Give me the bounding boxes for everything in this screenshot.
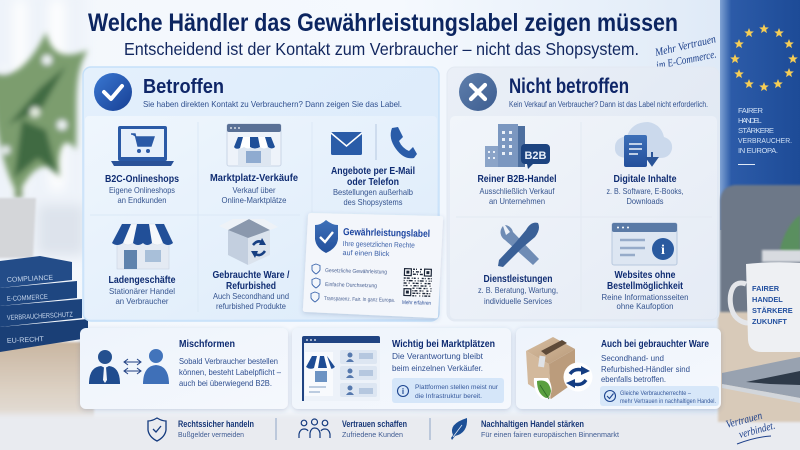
mug: STÄRKERE [752,306,793,315]
callout: Plattformen: Plattformen stellen meist nur [415,384,499,391]
card: Auch bei gebrauchter Ware: ebenfalls betroffen. [601,374,666,384]
handwritten note: Vertrauen verbindet [725,410,777,444]
label card: Gewährleistungslabel: Gewährleistungslabel [343,227,430,240]
item: Websites ohne Bestellmöglichkeit: Reine Informationsseiten [602,292,689,302]
label checklist: Transparenz. Fair. In ganz Europa. [324,296,395,304]
item: Angebote per E-Mail oder Telefon: Angebote per E-Mail [331,166,415,177]
background: table [0,342,94,442]
background: EU flag [720,0,800,230]
handwritten note: Vertrauen verbindet: Vertrauen [725,410,764,431]
handwritten note: Vertrauen verbindet: verbindet. [738,420,777,441]
card: Auch bei gebrauchter Ware: Auch bei gebrauchter Ware [601,339,709,350]
background: window blinds [0,0,85,260]
benefit: Nachhaltigen Handel stärken: Für einen fairen europäischen Binnenmarkt [481,430,620,439]
card: Mischformen: können, besteht Labelpflicht – [179,367,281,377]
item: Ladengeschäfte [108,224,176,306]
books stack [0,256,88,352]
item: B2C-Onlineshops: an Endkunden [118,195,167,205]
card: Wichtig bei Marktplätzen: beim einzelnen Verkäufer. [392,363,483,373]
icon: laptop with cart [111,126,174,166]
icon: wrench and screwdriver [498,223,539,267]
item: B2C-Onlineshops: Eigene Onlineshops [109,185,175,195]
books stack: COMPLIANCE [7,275,54,284]
item: Digitale Inhalte: z. B. Software, E-Books, [606,186,684,196]
icon: EU stars [730,24,798,91]
item: Marktplatz-Verkäufe [210,124,298,205]
item: Gebrauchte Ware / Refurbished: Refurbished [226,281,276,292]
callout: Gleiche Verbraucherrechte [600,386,719,406]
panel intro: Kein Verkauf an Verbraucher? Dann ist das Label nicht erforderlich. [509,100,708,109]
benefit: Nachhaltigen Handel stärken: Nachhaltigen Handel stärken [481,419,584,429]
item: Websites ohne Bestellmöglichkeit: Websites ohne [614,270,676,281]
benefit: Vertrauen schaffen [299,419,407,439]
icon: storefront [112,224,173,269]
mug [730,262,800,352]
callout: Plattformen [392,378,504,403]
item: Websites ohne Bestellmöglichkeit: ohne Kaufoption [616,301,674,311]
panel: Betroffen [83,67,443,321]
callout: Plattformen: i [402,387,404,396]
card: Mischformen: Sobald Verbraucher bestellen [179,356,278,366]
flag slogan [738,106,792,165]
item: Gebrauchte Ware / Refurbished: refurbished Produkte [216,301,286,311]
item: Ladengeschäfte: an Verbraucher [116,296,169,306]
subtitle: Entscheidend ist der Kontakt zum Verbraucher – nicht das Shopsystem. [124,39,639,59]
icon: business person and consumer [89,349,169,384]
item: Angebote per E-Mail oder Telefon: des Shopsystems [344,197,402,207]
flag slogan: IN EUROPA. [738,146,778,155]
item: Reiner B2B-Handel: Ausschließlich Verkauf [480,186,555,196]
icon: cross badge [459,73,497,111]
label checklist: Einfache Durchsetzung [325,282,377,289]
item: Angebote per E-Mail oder Telefon: Bestellungen außerhalb [333,187,413,197]
card: Wichtig bei Marktplätzen: Die Verantwortung bleibt [392,351,484,361]
item: Ladengeschäfte: Ladengeschäfte [108,275,176,286]
icon: open box with refresh arrows [219,219,278,265]
item: Digitale Inhalte: Downloads [626,196,664,206]
mug: ZUKUNFT [752,317,787,326]
background: laptop lid [720,185,800,325]
card: Mischformen: auch bei überwiegend B2B. [179,378,272,388]
item: Ladengeschäfte: Stationärer Handel [109,286,175,296]
background: lower tabletop [0,414,800,450]
handwritten note: Mehr Vertrauen im E-Commerce: im E-Commerce. [655,49,717,72]
QR code [403,268,432,297]
card: Auch bei gebrauchter Ware: Secondhand- und [601,353,664,363]
icon: cloud with document [615,122,672,167]
item: Dienstleistungen: z. B. Beratung, Wartung, [478,285,558,295]
item: Websites ohne Bestellmöglichkeit: Bestellmöglichkeit [607,281,684,292]
benefit: Vertrauen schaffen: Zufriedene Kunden [342,430,403,439]
flag slogan: FAIRER [738,106,764,115]
item: Gebrauchte Ware / Refurbished: Gebrauchte Ware / [212,270,290,281]
card: Mischformen [80,328,288,409]
label card: Gewährleistungslabel: Ihre gesetzlichen Rechte [343,239,415,250]
icon: phone [391,127,417,158]
callout: Gleiche Verbraucherrechte: mehr Vertrauen in nachhaltigen Handel. [620,399,716,405]
flag slogan: STÄRKERE [738,126,774,135]
label checklist [311,264,395,304]
icon: marketplace page with seller rows [302,336,380,401]
item: Gebrauchte Ware / Refurbished [212,219,290,311]
flag slogan: VERBRAUCHER. [738,136,792,145]
background: plant pot [0,198,36,258]
item: Dienstleistungen [478,223,558,306]
item: Angebote per E-Mail oder Telefon: oder Telefon [347,177,399,188]
flag slogan: HANDEL. [738,116,762,125]
handwritten note: Mehr Vertrauen im E-Commerce [653,33,718,78]
laptop base [722,357,800,403]
books stack: EU-RECHT [7,336,45,345]
item: Digitale Inhalte [606,122,684,206]
card: Wichtig bei Marktplätzen [292,328,511,409]
mug: FAIRER [752,284,780,293]
item: B2C-Onlineshops: B2C-Onlineshops [105,174,179,185]
mug: HANDEL [752,295,783,304]
item: Marktplatz-Verkäufe: Verkauf über [232,185,276,195]
item: Reiner B2B-Handel: Reiner B2B-Handel [478,174,557,185]
heading: Betroffen: Betroffen [143,76,224,98]
item: Digitale Inhalte: Digitale Inhalte [614,174,677,185]
benefits row [148,418,620,441]
heading: Nicht betroffen: Nicht betroffen [509,75,629,98]
item: Websites ohne Bestellmöglichkeit [602,223,689,311]
benefit: Vertrauen schaffen: Vertrauen schaffen [342,419,407,429]
label card: Gewährleistungslabel: auf einen Blick [343,248,390,258]
icon: office building with B2B badge: B2B [524,150,547,162]
icon: cardboard box with leaf and refresh badge [526,337,592,399]
label checklist: Gesetzliche Gewährleistung [325,268,387,276]
benefit: Rechtssicher handeln: Rechtssicher handeln [178,419,254,429]
handwritten note: Mehr Vertrauen im E-Commerce: Mehr Vertrauen [653,33,718,59]
icon: envelope [331,132,362,155]
callout: Gleiche Verbraucherrechte: Gleiche Verbraucherrechte – [620,391,692,397]
card: Auch bei gebrauchter Ware: Refurbished-Händler sind [601,364,690,374]
item: Reiner B2B-Handel: an Unternehmen [489,196,545,206]
background: plant [0,32,88,198]
item: Gebrauchte Ware / Refurbished: Auch Secondhand und [213,291,289,301]
label card: Gewährleistungslabel [303,213,443,318]
card: Wichtig bei Marktplätzen: Wichtig bei Marktplätzen [392,339,495,350]
panel intro: Sie haben direkten Kontakt zu Verbrauchern? Dann zeigen Sie das Label. [143,99,402,109]
panel: Nicht betroffen [447,67,719,321]
card: Auch bei gebrauchter Ware [516,328,721,409]
callout: Plattformen: die Infrastruktur bereit. [415,393,482,400]
benefit: Nachhaltigen Handel stärken [451,418,620,440]
item: Marktplatz-Verkäufe: Online-Marktplätze [222,195,287,205]
card: Mischformen: Mischformen [179,339,235,350]
books stack: VERBRAUCHERSCHUTZ [7,312,74,322]
benefit: Rechtssicher handeln: Bußgelder vermeiden [178,430,244,439]
icon: marketplace window [227,124,281,166]
background: small plant [780,215,800,255]
background: right table [718,312,800,422]
item: Dienstleistungen: individuelle Services [484,296,552,306]
label card: Gewährleistungslabel: Mehr erfahren [402,300,431,307]
icon: check badge [94,73,132,111]
item: Reiner B2B-Handel [478,124,557,206]
item: Dienstleistungen: Dienstleistungen [484,274,552,285]
benefit: Rechtssicher handeln [148,418,254,441]
title: Welche Händler das Gewährleistungslabel zeigen müssen [88,9,678,37]
icon: shield [315,220,338,253]
item: Marktplatz-Verkäufe: Marktplatz-Verkäufe [210,173,298,184]
item: B2C-Onlineshops [105,126,179,205]
item: Angebote per E-Mail oder Telefon [331,124,417,207]
icon: web page with info badge: i [661,243,665,258]
books stack: E-COMMERCE [7,294,48,303]
